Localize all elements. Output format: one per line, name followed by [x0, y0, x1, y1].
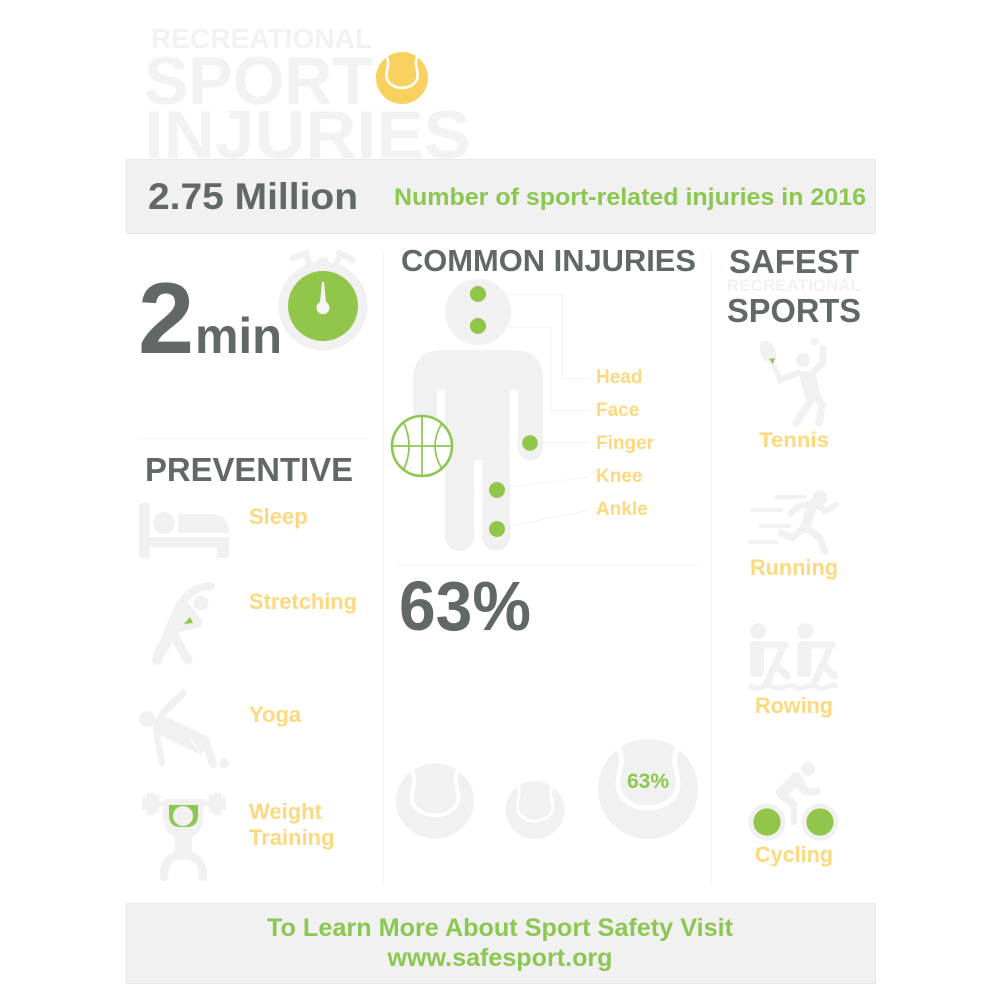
- body part labels: Face: [596, 400, 639, 421]
- icon: rowers: [750, 623, 836, 688]
- body part labels: Knee: [596, 466, 642, 487]
- footer panel: www.safesport.org: [386, 944, 612, 972]
- title: [144, 23, 471, 173]
- icon: runner: [750, 490, 836, 552]
- heading: safest sports: SAFEST: [729, 243, 859, 280]
- banner: total injuries: 2.75 Million: [148, 176, 358, 217]
- label: weight training: Weight: [249, 799, 323, 824]
- heading: safest sports: SPORTS: [727, 292, 861, 329]
- stat: 63 percent: 63%: [399, 567, 531, 645]
- icon: bed: [139, 503, 229, 558]
- banner: total injuries: [126, 160, 876, 234]
- body part labels: [596, 367, 655, 520]
- heading: common injuries: COMMON INJURIES: [401, 243, 696, 278]
- leader lines: [505, 294, 590, 526]
- injury dots: [470, 286, 538, 537]
- body part labels: Ankle: [596, 499, 648, 520]
- stat: 2 min: [138, 263, 282, 375]
- footer panel: [126, 904, 876, 984]
- title: SPORT: [144, 43, 373, 119]
- label: weight training: Training: [249, 825, 335, 850]
- title: RECREATIONAL: [151, 23, 372, 54]
- icon: stretching figure: [152, 586, 211, 660]
- icon: yellow tennis ball: [376, 52, 428, 104]
- banner: total injuries: Number of sport-related injuries in 2016: [394, 184, 866, 211]
- stat: 2 min: min: [195, 308, 282, 364]
- title: INJURIES: [144, 97, 471, 173]
- icon: small grey tennis ball left: [396, 764, 474, 838]
- icon: large grey tennis ball with 63 percent: [598, 739, 698, 839]
- icon: tennis player: [757, 338, 823, 423]
- body diagram: [392, 279, 655, 551]
- heading: safest sports: RECREATIONAL: [727, 276, 861, 295]
- label: stretching: Stretching: [249, 589, 357, 614]
- label: cycling: Cycling: [755, 842, 833, 867]
- icon: weightlifter: [142, 793, 226, 877]
- body figure: [413, 279, 543, 551]
- footer panel: To Learn More About Sport Safety Visit: [267, 914, 734, 942]
- label: yoga: Yoga: [249, 702, 302, 727]
- label: tennis: Tennis: [759, 429, 829, 452]
- label: running: Running: [750, 555, 838, 580]
- label: sleep: Sleep: [249, 504, 308, 529]
- heading: preventive: PREVENTIVE: [145, 451, 353, 488]
- label: weight training: [249, 799, 335, 850]
- icon: yoga figure: [139, 693, 229, 768]
- icon: cyclist: [748, 762, 838, 840]
- body part labels: Finger: [596, 433, 655, 454]
- stat: 2 min: 2: [138, 263, 194, 375]
- icon: large grey tennis ball with 63 percent: 63%: [627, 770, 669, 793]
- icon: basketball: [392, 416, 452, 476]
- icon: stopwatch: [278, 253, 368, 350]
- icon: smallest grey tennis ball: [506, 781, 564, 839]
- body part labels: Head: [596, 367, 642, 388]
- heading: safest sports: [727, 243, 861, 329]
- label: rowing: Rowing: [755, 693, 833, 718]
